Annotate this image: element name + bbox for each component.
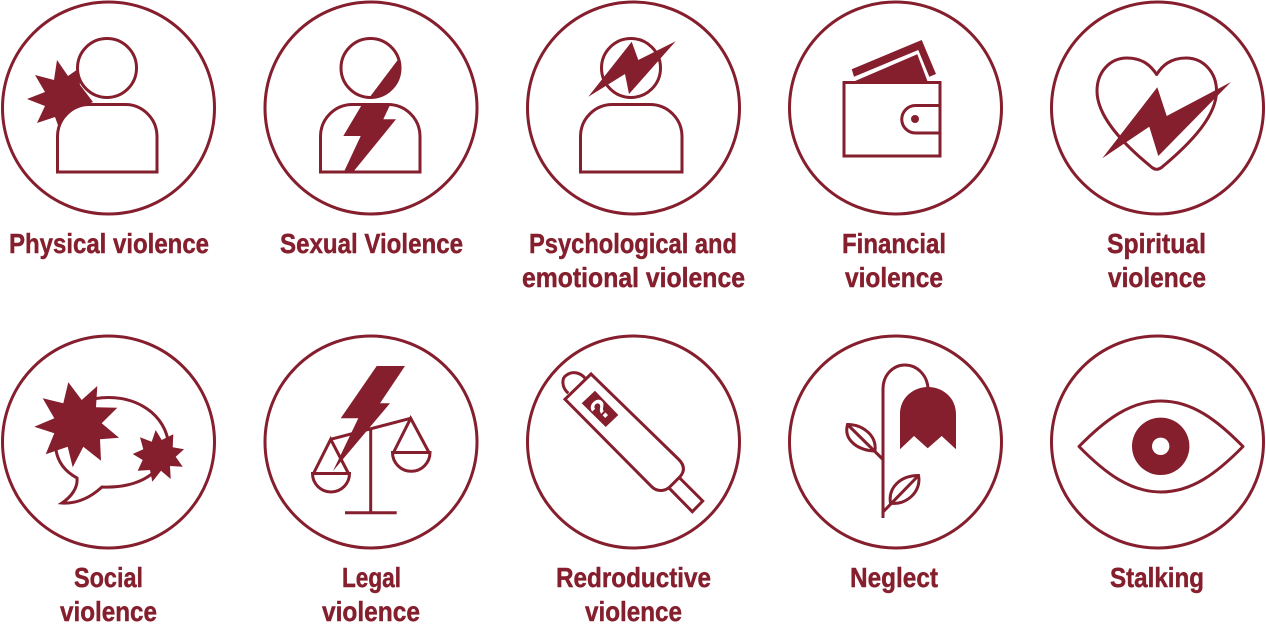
- label: reproductive violence: Redroductive: [556, 562, 711, 593]
- panel: reproductive violence: [528, 336, 740, 627]
- label: psychological and emotional violence: Psychological and: [529, 228, 737, 259]
- icon: person with lightning bolt: [265, 2, 477, 214]
- icon: person with bolt through head: [528, 2, 740, 214]
- panel: social violence: [2, 336, 214, 627]
- label: social violence: violence: [60, 596, 157, 627]
- label: legal violence: violence: [322, 596, 420, 627]
- panel: stalking: [1052, 336, 1264, 593]
- label: spiritual violence: violence: [1108, 262, 1206, 293]
- label: legal violence: Legal: [342, 562, 401, 593]
- label: psychological and emotional violence: emotional violence: [522, 262, 745, 293]
- panel: psychological and emotional violence: [522, 2, 745, 293]
- panel: physical violence: [2, 2, 214, 259]
- label: physical violence: Physical violence: [9, 228, 209, 259]
- panel: sexual violence: [265, 2, 477, 259]
- label: sexual violence: Sexual Violence: [280, 228, 463, 259]
- icon: speech bubble with bursts: [2, 336, 214, 548]
- panel: legal violence: [265, 336, 477, 627]
- panel: spiritual violence: [1052, 2, 1264, 293]
- icon: heart with lightning bolt: [1052, 2, 1264, 214]
- label: financial violence: Financial: [842, 228, 946, 259]
- question mark: ?: [583, 392, 617, 426]
- label: neglect: Neglect: [850, 562, 938, 593]
- icon: pregnancy test: [528, 336, 740, 548]
- label: reproductive violence: violence: [585, 596, 682, 627]
- icon: scales with lightning bolt: [265, 336, 477, 548]
- icon: wallet with card: [790, 2, 1002, 214]
- label: financial violence: violence: [845, 262, 943, 293]
- panel: neglect: [790, 336, 1002, 593]
- icon: wilting flower: [790, 336, 1002, 548]
- label: social violence: Social: [74, 562, 143, 593]
- icon: injured person with burst: [2, 2, 214, 214]
- label: spiritual violence: Spiritual: [1107, 228, 1206, 259]
- icon: eye: [1052, 336, 1264, 548]
- label: stalking: Stalking: [1110, 562, 1204, 593]
- panel: financial violence: [790, 2, 1002, 293]
